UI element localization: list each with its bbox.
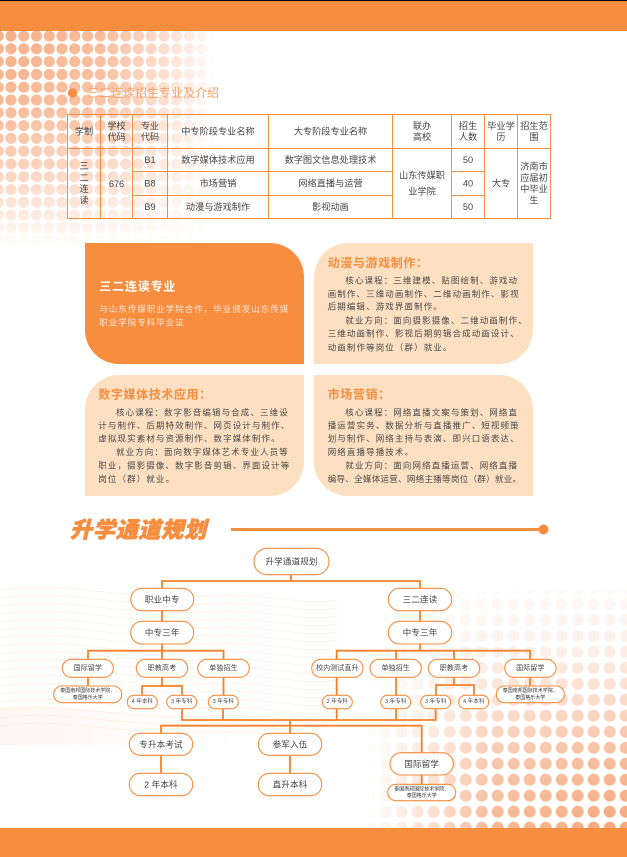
node: secondary three years right: 中专三年 bbox=[403, 627, 438, 638]
node: Thai universities right: 泰国格乐大学 bbox=[515, 694, 545, 701]
node: direct bachelor: 直升本科 bbox=[273, 778, 308, 790]
panel: digital media: 核心课程：数字影音编辑与合成、三维设 bbox=[116, 407, 289, 417]
panel: program summary: 与山东传媒职业学院合作，毕业颁发山东传媒 bbox=[99, 304, 289, 314]
node: three-two program bbox=[388, 588, 452, 611]
panel: marketing bbox=[314, 375, 533, 496]
enrollment table: 应届初 bbox=[520, 172, 548, 183]
node: 2-year college bbox=[322, 695, 352, 709]
enrollment table: 招生范 bbox=[520, 120, 548, 131]
panel: marketing: 播运营实务、数据分析与直播推广、短视频策 bbox=[328, 421, 520, 431]
panel: marketing: 市场营销： bbox=[328, 386, 391, 401]
node: Thai universities left: 泰国南邦国际技术学院、 bbox=[60, 687, 115, 694]
enrollment table: B8 bbox=[144, 178, 156, 188]
panel: program summary: 三二连读专业 bbox=[99, 279, 176, 294]
enrollment table: 高校 bbox=[413, 131, 431, 142]
node: military service bbox=[258, 733, 322, 755]
enrollment table: 联办 bbox=[413, 120, 431, 131]
node: 3-year college right b bbox=[421, 695, 451, 709]
panel: animation and games: 就业方向：面向摄影摄像、二维动画制作、 bbox=[345, 316, 528, 326]
enrollment table: 历 bbox=[496, 132, 506, 142]
enrollment table: 二 bbox=[79, 173, 89, 183]
enrollment table: 50 bbox=[463, 155, 473, 165]
enrollment table: 大专阶段专业名称 bbox=[294, 126, 367, 136]
node: 4-year bachelor right bbox=[459, 695, 489, 709]
node: 3-year college left b bbox=[208, 695, 238, 709]
panel: animation and games: 核心课程：三维建模、贴图绘制、游戏动 bbox=[345, 276, 518, 286]
enrollment table: 济南市 bbox=[520, 161, 548, 172]
panel: digital media: 虚拟现实素材与资源制作、数字媒体制作。 bbox=[98, 434, 281, 444]
panel: digital media: 职业，摄影摄像、数字影音剪辑、界面设计等 bbox=[98, 461, 290, 471]
enrollment table: 三 bbox=[79, 161, 89, 171]
node: upgrade exam: 专升本考试 bbox=[139, 738, 183, 749]
panel: marketing: 网络直播导播技术。 bbox=[328, 447, 414, 457]
enrollment table: 动漫与游戏制作 bbox=[186, 201, 250, 212]
enrollment table: 中专阶段专业名称 bbox=[181, 126, 255, 136]
node: 3-year college right a: 3 年专科 bbox=[385, 697, 407, 705]
panel: marketing: 核心课程：网络直播文案与策划、网络直 bbox=[345, 407, 518, 417]
node: Thai universities right: 泰国南邦国际技术学院、 bbox=[503, 687, 558, 694]
enrollment table: 代码 bbox=[141, 132, 159, 142]
node: upgrade exam bbox=[129, 733, 193, 755]
node: root: 升学通道规划 bbox=[265, 556, 318, 566]
panel: animation and games: 三维动画制作、影视后期剪辑合成动画设计、 bbox=[328, 329, 520, 339]
panel: program summary: 职业学院专科毕业证 bbox=[99, 318, 185, 328]
enrollment table: 数字图文信息处理技术 bbox=[285, 154, 376, 165]
node: study abroad left: 国际留学 bbox=[74, 663, 102, 672]
panel: marketing: 划与制作、网络主持与表演、即兴口语表达、 bbox=[328, 434, 520, 444]
enrollment table: 山东传媒职 bbox=[399, 170, 445, 181]
flow chart: pathway planning bbox=[54, 548, 564, 801]
enrollment table: 读 bbox=[79, 194, 89, 206]
panel: animation and games: 动漫与游戏制作： bbox=[328, 255, 429, 270]
enrollment table: 40 bbox=[463, 178, 473, 188]
node: Thai universities left: 泰国格乐大学 bbox=[73, 694, 103, 701]
top orange band bbox=[0, 0, 627, 31]
enrollment table: 学制 bbox=[75, 126, 93, 136]
node: vocational exam left: 职教高考 bbox=[148, 663, 176, 672]
panel: marketing: 编导、全媒体运营、网络主播等岗位（群）就业。 bbox=[328, 474, 521, 484]
node: 2-year bachelor bbox=[129, 773, 193, 796]
enrollment table: 学校 bbox=[107, 120, 126, 131]
panel: animation and games bbox=[314, 243, 533, 364]
node: 2-year bachelor: 2 年本科 bbox=[144, 778, 178, 790]
node: vocational secondary: 职业中专 bbox=[145, 594, 180, 604]
enrollment table: 代码 bbox=[107, 132, 126, 142]
node: 4-year bachelor left: 4 年本科 bbox=[132, 697, 153, 705]
node: independent admission left: 单独招生 bbox=[209, 663, 238, 672]
node: study abroad bottom bbox=[390, 753, 453, 775]
node: Thai universities bottom: 泰国南邦国际技术学院、 bbox=[394, 785, 449, 792]
panel: animation and games: 动画制作等岗位（群）就业。 bbox=[328, 342, 453, 352]
halftone dots: bottom right bbox=[365, 590, 627, 828]
enrollment table: 数字媒体技术应用 bbox=[181, 154, 255, 165]
section heading: pathway planning bbox=[70, 518, 548, 542]
enrollment table: 生 bbox=[529, 195, 539, 206]
enrollment table: 中毕业 bbox=[520, 183, 548, 194]
section heading: pathway planning: 升学通道规划 bbox=[70, 518, 210, 542]
panel: digital media: 就业方向：面向数字媒体艺术专业人员等 bbox=[116, 447, 289, 457]
node: Thai universities right bbox=[496, 686, 564, 703]
panel: animation and games: 后期编辑、游戏界面制作。 bbox=[328, 302, 443, 312]
panel: digital media bbox=[85, 375, 304, 496]
enrollment table: 专业 bbox=[141, 120, 159, 131]
node: 3-year college left a bbox=[167, 695, 197, 709]
node: vocational exam right bbox=[428, 659, 480, 677]
panel: digital media: 计与制作、后期特效制作、网页设计与制作、 bbox=[98, 421, 290, 431]
enrollment table: 毕业学 bbox=[487, 120, 515, 131]
node: direct bachelor bbox=[258, 773, 322, 796]
enrollment table: 网络直播与运营 bbox=[298, 178, 363, 188]
connectors bbox=[88, 575, 530, 785]
node: vocational secondary bbox=[131, 588, 194, 611]
panel: program summary bbox=[85, 243, 304, 364]
node: vocational exam right: 职教高考 bbox=[440, 663, 468, 672]
node: 3-year college left a: 3 年专科 bbox=[171, 697, 193, 705]
node: Thai universities bottom: 泰国格乐大学 bbox=[407, 792, 437, 799]
node: Thai universities left bbox=[54, 686, 122, 703]
panel: animation and games: 画制作、三维动画制作、二维动画制作、影视 bbox=[328, 289, 520, 299]
node: secondary three years left bbox=[131, 621, 194, 644]
enrollment table: 大专 bbox=[492, 178, 510, 188]
node: independent admission left bbox=[198, 659, 249, 677]
node: study abroad right: 国际留学 bbox=[516, 663, 545, 672]
bottom orange band bbox=[0, 828, 627, 857]
node: three-two program: 三二连读 bbox=[403, 594, 438, 604]
enrollment table: B9 bbox=[144, 202, 156, 212]
node: independent admission right: 单独招生 bbox=[381, 663, 410, 672]
node: vocational exam left bbox=[136, 659, 188, 677]
node: military service: 参军入伍 bbox=[273, 738, 308, 749]
node: study abroad left bbox=[62, 659, 113, 677]
enrollment table: 676 bbox=[109, 179, 124, 189]
node: study abroad bottom: 国际留学 bbox=[404, 758, 439, 769]
enrollment table: 招生 bbox=[459, 120, 477, 131]
node: secondary three years right bbox=[388, 621, 452, 644]
node: 3-year college right a bbox=[381, 695, 411, 709]
node: 2-year college: 2 年专科 bbox=[327, 697, 348, 705]
node: 3-year college right b: 3 年专科 bbox=[425, 697, 447, 705]
background waves: left bbox=[0, 587, 340, 745]
node: 3-year college left b: 3 年专科 bbox=[213, 697, 234, 705]
node: 4-year bachelor right: 4 年本科 bbox=[463, 697, 485, 705]
node: secondary three years left: 中专三年 bbox=[145, 627, 180, 638]
panel: marketing: 就业方向：面向网络直播运营、网络直播 bbox=[345, 461, 518, 471]
node: 4-year bachelor left bbox=[127, 695, 157, 709]
enrollment table bbox=[68, 114, 550, 218]
node: root bbox=[254, 548, 329, 575]
node: internal test right: 校内测试直升 bbox=[316, 663, 359, 672]
enrollment table: 业学院 bbox=[408, 186, 436, 197]
panel: digital media: 岗位（群）就业。 bbox=[98, 474, 175, 484]
enrollment table: 市场营销 bbox=[200, 178, 236, 188]
node: internal test right bbox=[312, 659, 363, 677]
enrollment table: 围 bbox=[529, 132, 539, 142]
section heading: enrollment majors: 三二连读招生专业及介绍 bbox=[87, 85, 219, 100]
enrollment table: 50 bbox=[463, 202, 473, 212]
node: Thai universities bottom bbox=[388, 784, 456, 801]
enrollment table: 人数 bbox=[459, 131, 477, 142]
panel: digital media: 数字媒体技术应用： bbox=[98, 386, 212, 401]
enrollment table: 影视动画 bbox=[312, 201, 349, 212]
node: independent admission right bbox=[370, 659, 421, 677]
node: study abroad right bbox=[505, 659, 556, 677]
enrollment table: B1 bbox=[144, 155, 156, 165]
halftone dots: top left bbox=[0, 31, 215, 246]
enrollment table: 连 bbox=[79, 183, 89, 194]
